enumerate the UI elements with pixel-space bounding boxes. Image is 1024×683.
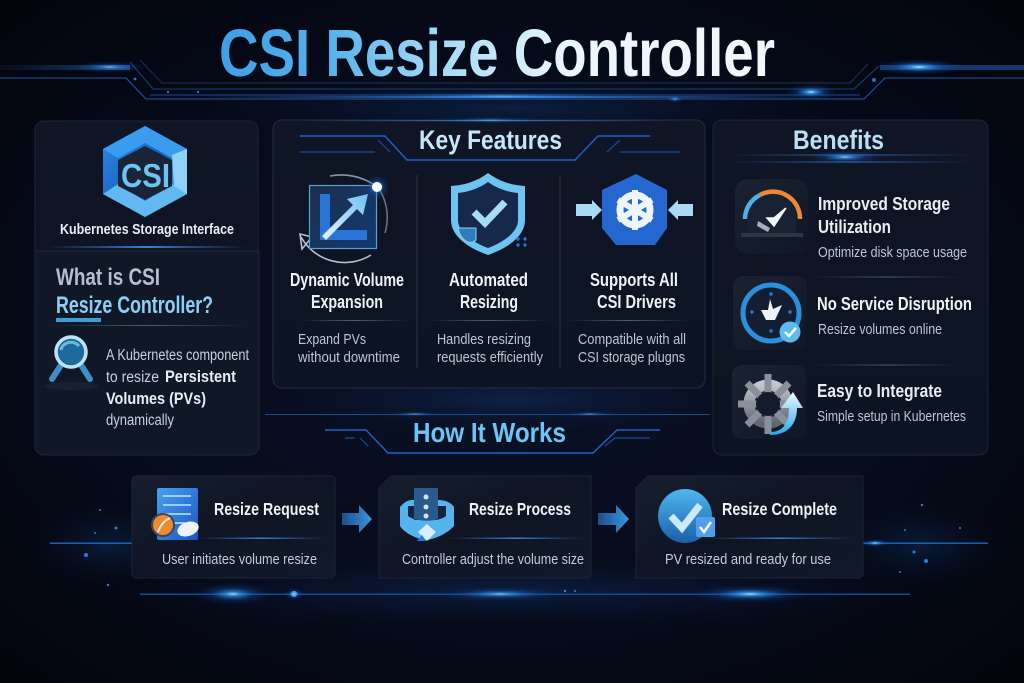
panel: step 2 resize process: Resize Process [469, 499, 571, 519]
heading: What is CSI Resize Controller: Resize Controller? [56, 292, 213, 319]
panel: step 3 resize complete [636, 476, 863, 578]
panel: step 1 resize request: Resize Request [214, 499, 319, 519]
benefit: easy to integrate [732, 365, 966, 439]
feature: supports all CSI drivers: Supports All [590, 270, 678, 290]
heading: How It Works [265, 411, 710, 453]
benefit: improved storage utilization: Improved Storage [818, 193, 950, 214]
benefit: no service disruption [733, 276, 972, 350]
icon: expand square [300, 174, 390, 263]
arrow: step 2 to step 3 [598, 505, 629, 533]
panel: benefits [713, 120, 988, 455]
icon: request document [151, 488, 201, 540]
icon: kubernetes hexagon with arrows [576, 174, 693, 245]
heading: How It Works: How It Works [413, 417, 566, 448]
feature: automated resizing: Resizing [460, 292, 518, 312]
benefit: improved storage utilization: Optimize disk space usage [818, 244, 967, 261]
heading: Key Features [300, 125, 680, 160]
feature: dynamic volume expansion: without downtime [297, 349, 400, 366]
heading: What is CSI Resize Controller: What is CSI [56, 264, 160, 291]
feature: automated resizing: requests efficiently [437, 349, 543, 366]
side and bottom light streaks [50, 504, 988, 605]
feature: supports all CSI drivers: CSI Drivers [597, 292, 676, 312]
panel: step 1 resize request [132, 476, 335, 578]
panel: what is CSI [35, 121, 259, 455]
feature: automated resizing: Automated [449, 270, 528, 290]
panel: key features [273, 116, 705, 388]
feature: automated resizing [425, 173, 552, 366]
benefit: no service disruption: No Service Disruption [817, 293, 972, 314]
header circuit lines [0, 59, 1024, 103]
icon: gear with up arrow [732, 365, 806, 439]
feature: supports all CSI drivers: CSI storage plugns [578, 349, 685, 366]
benefit: easy to integrate: Easy to Integrate [817, 380, 942, 401]
description text: dynamically [106, 412, 174, 429]
description text: Volumes (PVs) [106, 390, 206, 408]
panel: step 3 resize complete: PV resized and ready for use [665, 551, 831, 568]
description text: A Kubernetes component [106, 347, 250, 364]
icon: gauge [735, 179, 808, 254]
subtitle: Kubernetes Storage Interface: Kubernetes Storage Interface [60, 221, 234, 238]
feature: dynamic volume expansion [290, 174, 410, 366]
feature: supports all CSI drivers: Compatible with all [578, 331, 686, 348]
heading: Key Features: Key Features [419, 125, 562, 155]
feature: dynamic volume expansion: Dynamic Volume [290, 270, 404, 290]
feature: supports all CSI drivers [567, 174, 693, 366]
icon: CSI hexagon logo: CSI [121, 157, 170, 194]
icon: magnifier [44, 337, 98, 390]
panel: step 2 resize process [379, 476, 591, 578]
icon: CSI hexagon logo [103, 126, 187, 217]
feature: dynamic volume expansion: Expand PVs [298, 331, 366, 348]
description text [106, 347, 250, 429]
title: CSI Resize Controller [219, 16, 775, 91]
panel: step 1 resize request: User initiates volume resize [162, 551, 317, 568]
description text: Persistent [165, 368, 236, 386]
icon: resize process [400, 488, 454, 541]
panel: step 3 resize complete: Resize Complete [722, 499, 837, 519]
panel: step 2 resize process: Controller adjust the volume size [402, 551, 584, 568]
heading: Benefits: Benefits [793, 125, 884, 155]
benefit: improved storage utilization [735, 179, 967, 261]
benefit: no service disruption: Resize volumes online [818, 321, 942, 338]
benefit: improved storage utilization: Utilization [818, 216, 891, 237]
feature: dynamic volume expansion: Expansion [311, 292, 383, 312]
icon: complete check badge [658, 489, 715, 543]
icon: shield with check [451, 173, 527, 255]
benefit: easy to integrate: Simple setup in Kubernetes [817, 408, 966, 425]
heading: What is CSI Resize Controller [56, 264, 213, 322]
description text: to resize [106, 369, 159, 386]
feature: automated resizing: Handles resizing [437, 331, 531, 348]
icon: clock with check [733, 276, 807, 350]
arrow: step 1 to step 2 [342, 505, 372, 533]
heading: Benefits [725, 125, 975, 164]
